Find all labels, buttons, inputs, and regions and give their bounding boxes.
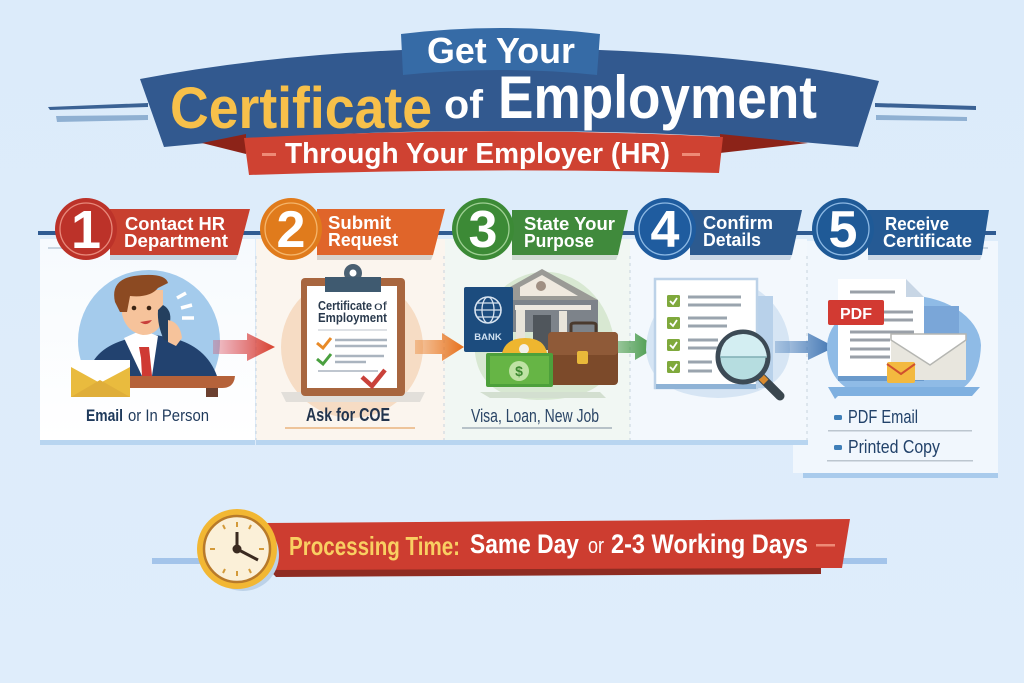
icon: clipboard: of: [374, 299, 388, 313]
caption: email or in person: or In Person: [128, 406, 209, 425]
phone and hand: [158, 305, 174, 341]
processing time text: Processing Time:: [289, 531, 460, 561]
step 2 header: Request: [328, 230, 398, 250]
caption: ask for coe: [285, 405, 415, 429]
small envelope: [887, 362, 915, 383]
processing time text: or: [588, 533, 604, 558]
step 4 header: [634, 198, 802, 260]
step 5 header: Receive: [885, 214, 949, 234]
list: delivery options: PDF Email: [848, 407, 918, 427]
passport: [464, 287, 513, 352]
processing time text: [289, 529, 835, 561]
main blue ribbon: [140, 50, 879, 147]
money: [502, 338, 547, 353]
main heading: of: [444, 83, 484, 127]
step 1 header: Contact HR: [125, 214, 225, 234]
arrow: step 4 to 5: [775, 333, 835, 360]
envelope: [71, 360, 130, 397]
get your tab: [401, 28, 600, 75]
title banner: [48, 28, 976, 175]
get your tab: Get Your: [427, 30, 575, 71]
arrow: step 2 to 3: [415, 333, 464, 361]
bank: [510, 269, 598, 300]
step 3 header: [452, 198, 628, 260]
magnifier: [762, 378, 780, 396]
panel: step 2 background: [256, 239, 445, 445]
red subtitle ribbon: Through Your Employer (HR): [285, 138, 670, 170]
suit: [88, 334, 217, 376]
caption: visa, loan, new job: Visa, Loan, New Job: [471, 406, 599, 426]
step 5 header: 5: [829, 201, 857, 259]
step 3 header: Purpose: [524, 231, 594, 251]
icon: pdf document with envelope: [827, 279, 981, 399]
caption: ask for coe: Ask for COE: [306, 405, 390, 425]
main heading: Certificate: [170, 76, 432, 141]
step 5 header: [812, 198, 989, 260]
caption: email or in person: [86, 406, 209, 425]
list: delivery options: Printed Copy: [848, 437, 940, 457]
panel: step 5 background: [793, 241, 998, 478]
step 3 header: State Your: [524, 214, 615, 234]
panel: step row background line: [38, 231, 996, 235]
check items: [667, 295, 741, 373]
processing time banner: [152, 509, 887, 591]
icon: clipboard: Certificate: [318, 298, 372, 313]
list: delivery options: [827, 407, 973, 462]
passport: BANK: [474, 332, 502, 343]
processing time text: Same Day: [470, 529, 579, 559]
panel: step 1 background: [40, 239, 255, 445]
panel: step 4 background: [630, 239, 808, 445]
red subtitle ribbon: [244, 131, 723, 175]
desk: [130, 376, 235, 388]
face: [122, 290, 163, 335]
processing time text: 2-3 Working Days: [611, 529, 808, 559]
envelope: [891, 334, 966, 380]
step 2 header: Submit: [328, 213, 391, 233]
caption: email or in person: Email: [86, 406, 123, 425]
step 4 header: Details: [703, 230, 761, 250]
icon: clipboard: [281, 264, 425, 418]
step 2 header: 2: [277, 201, 305, 259]
icon: bank, passport, money, briefcase: $: [515, 363, 523, 379]
icon: clipboard: Employment: [318, 310, 388, 325]
step 2 header: [260, 198, 445, 260]
step 3 header: 3: [469, 201, 497, 259]
main heading: [170, 64, 817, 141]
step 4 header: 4: [651, 201, 680, 259]
step 1 header: [55, 198, 250, 260]
arrow: step 3 to 4: [618, 333, 657, 360]
arrow: step 1 to 2: [213, 333, 275, 361]
main heading: Employment: [498, 64, 817, 131]
step 4 header: Confirm: [703, 213, 773, 233]
icon: bank, passport, money, briefcase: [464, 269, 618, 400]
clock icon: [197, 509, 279, 591]
briefcase: [571, 323, 596, 333]
icon: checklist with magnifier: [646, 278, 790, 398]
dark ribbon folds: [202, 134, 808, 154]
step 1 header: 1: [71, 200, 101, 260]
pdf tag: [828, 300, 884, 325]
panel: step 3 background: [444, 239, 630, 445]
step 1 header: Department: [124, 231, 228, 251]
pdf tag: PDF: [840, 306, 872, 323]
icon: person on phone with envelope and desk: [71, 270, 235, 397]
step 5 header: Certificate: [883, 231, 972, 251]
